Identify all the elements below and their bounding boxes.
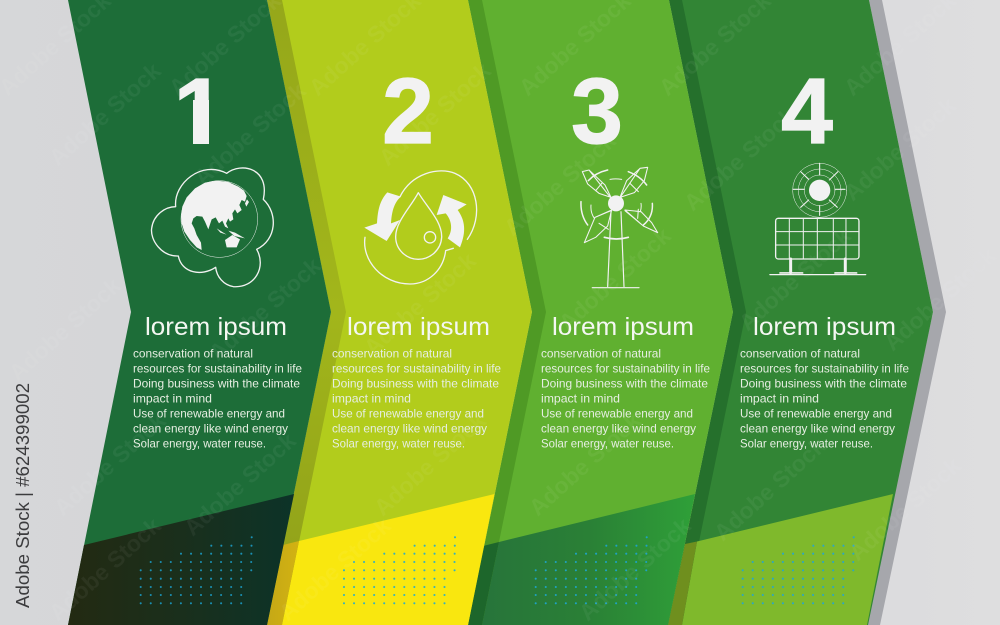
panel 2 left fold xyxy=(267,0,346,625)
heading: lorem ipsum xyxy=(753,313,896,341)
icon: earth in cloud xyxy=(152,168,273,287)
body text: conservation of natural xyxy=(332,346,452,360)
body text: Use of renewable energy and xyxy=(740,406,892,420)
body text xyxy=(133,346,302,450)
stock watermarks: Adobe Stock xyxy=(734,222,856,336)
body text: Use of renewable energy and xyxy=(133,406,285,420)
body text: Solar energy, water reuse. xyxy=(133,436,266,450)
panel 2 fold lower band xyxy=(267,541,299,625)
panel 3 fold lower band xyxy=(468,542,499,625)
icon: water drop with recycling arrows xyxy=(364,171,477,284)
stock watermarks: Adobe Stock xyxy=(839,92,961,206)
stock watermarks: Adobe Stock xyxy=(879,242,1000,356)
body text: Doing business with the climate xyxy=(332,376,499,390)
panel 1 dots xyxy=(141,537,252,603)
panel 3 body xyxy=(468,0,733,625)
panel 4 body xyxy=(668,0,933,625)
body text: clean energy like wind energy xyxy=(133,422,288,436)
heading: lorem ipsum xyxy=(347,313,490,341)
body text: Use of renewable energy and xyxy=(541,406,693,420)
body text: clean energy like wind energy xyxy=(541,422,696,436)
body text: clean energy like wind energy xyxy=(332,422,487,436)
body text xyxy=(541,346,710,450)
body text: Doing business with the climate xyxy=(541,376,708,390)
panel 3 lower band xyxy=(482,494,695,625)
body text: Solar energy, water reuse. xyxy=(332,436,465,450)
panel 1 lower band xyxy=(68,494,294,625)
icon: solar panel and sun xyxy=(770,163,866,275)
body text: impact in mind xyxy=(332,392,411,406)
number 1: 1 xyxy=(174,59,225,163)
side credit label: Adobe Stock | #624399002 xyxy=(13,383,33,608)
panel 4 dots xyxy=(743,537,854,603)
icon: wind turbine xyxy=(581,167,658,288)
body text xyxy=(332,346,501,450)
panel 4 lower band xyxy=(682,494,893,625)
heading: lorem ipsum xyxy=(145,313,287,341)
stock watermarks: Adobe Stock xyxy=(574,512,696,625)
number 2: 2 xyxy=(382,59,434,163)
stock watermarks: Adobe Stock xyxy=(274,512,396,625)
body text: resources for sustainability in life xyxy=(541,362,710,376)
body text xyxy=(740,346,909,450)
panel 2 lower band xyxy=(282,494,494,625)
stock watermarks: Adobe Stock xyxy=(554,222,676,336)
body text: Solar energy, water reuse. xyxy=(541,436,674,450)
body text: resources for sustainability in life xyxy=(133,362,302,376)
panel 4 xyxy=(668,0,933,625)
number 1 xyxy=(179,78,209,144)
body text: conservation of natural xyxy=(541,346,661,360)
body text: Doing business with the climate xyxy=(740,376,907,390)
stock watermarks: Adobe Stock xyxy=(204,252,326,366)
panel 2 dots xyxy=(344,537,455,603)
panel 1 body xyxy=(68,0,331,625)
panel 3 dots xyxy=(536,537,647,603)
stock watermarks: Adobe Stock xyxy=(359,247,481,361)
panel 4 fold lower band xyxy=(668,542,697,625)
stock watermarks: Adobe Stock xyxy=(524,407,646,521)
body text: impact in mind xyxy=(133,392,212,406)
stock watermarks: Adobe Stock xyxy=(189,77,311,191)
stock watermarks: Adobe Stock xyxy=(4,272,126,386)
stock watermarks: Adobe Stock xyxy=(499,127,621,241)
body text: clean energy like wind energy xyxy=(740,422,895,436)
stock watermarks: Adobe Stock xyxy=(44,512,166,625)
grey shadow behind panel 4 xyxy=(866,0,946,625)
panel 4 left fold xyxy=(668,0,746,625)
stock watermarks: Adobe Stock xyxy=(44,57,166,171)
panel 3 left fold xyxy=(468,0,546,625)
body text: Use of renewable energy and xyxy=(332,406,484,420)
heading: lorem ipsum xyxy=(552,313,694,341)
panel 1 xyxy=(68,0,331,625)
stock watermarks: Adobe Stock xyxy=(679,102,801,216)
panel 2 xyxy=(267,0,532,625)
stock watermarks: Adobe Stock xyxy=(49,407,171,521)
body text: conservation of natural xyxy=(133,346,253,360)
body text: Solar energy, water reuse. xyxy=(740,436,873,450)
body text: Doing business with the climate xyxy=(133,376,300,390)
stock watermarks: Adobe Stock xyxy=(709,432,831,546)
stock watermarks: Adobe Stock xyxy=(844,452,966,566)
body text: resources for sustainability in life xyxy=(332,362,501,376)
stock watermarks: Adobe Stock xyxy=(179,427,301,541)
body text: conservation of natural xyxy=(740,346,860,360)
body text: resources for sustainability in life xyxy=(740,362,909,376)
stock watermarks: Adobe Stock xyxy=(369,407,491,521)
number 3: 3 xyxy=(571,59,623,163)
body text: impact in mind xyxy=(740,392,819,406)
body text: impact in mind xyxy=(541,392,620,406)
panel 2 body xyxy=(267,0,532,625)
number 4: 4 xyxy=(781,59,833,163)
stock watermarks: Adobe Stock xyxy=(374,57,496,171)
panel 3 xyxy=(468,0,733,625)
